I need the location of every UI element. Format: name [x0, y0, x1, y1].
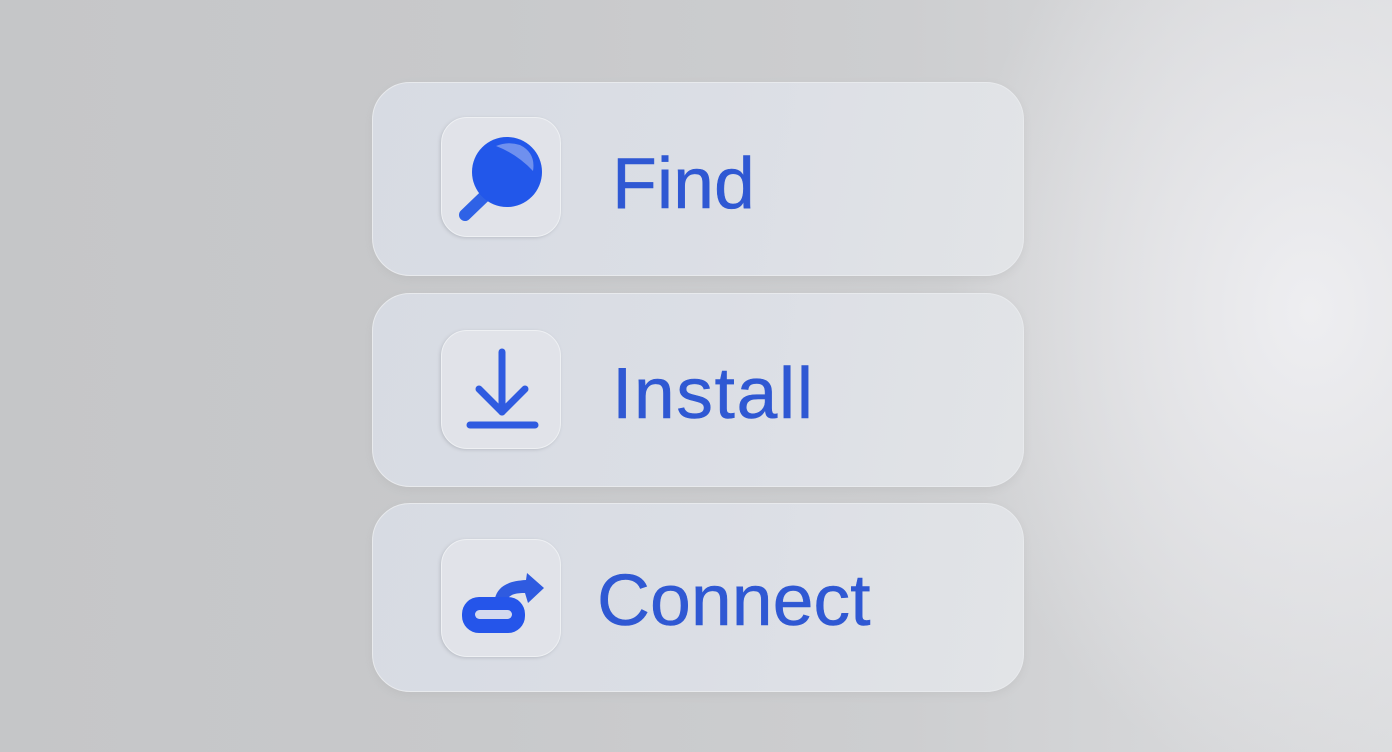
icon tile: connect — [441, 539, 561, 657]
label: Connect: Connect — [597, 561, 871, 641]
panel: install — [372, 293, 1024, 487]
label: Install: Install — [612, 354, 815, 434]
label: Find: Find — [612, 144, 755, 224]
panel: connect — [372, 503, 1024, 692]
icon tile: find — [441, 117, 561, 237]
panel: find — [372, 82, 1024, 276]
icon tile: install — [441, 330, 561, 449]
